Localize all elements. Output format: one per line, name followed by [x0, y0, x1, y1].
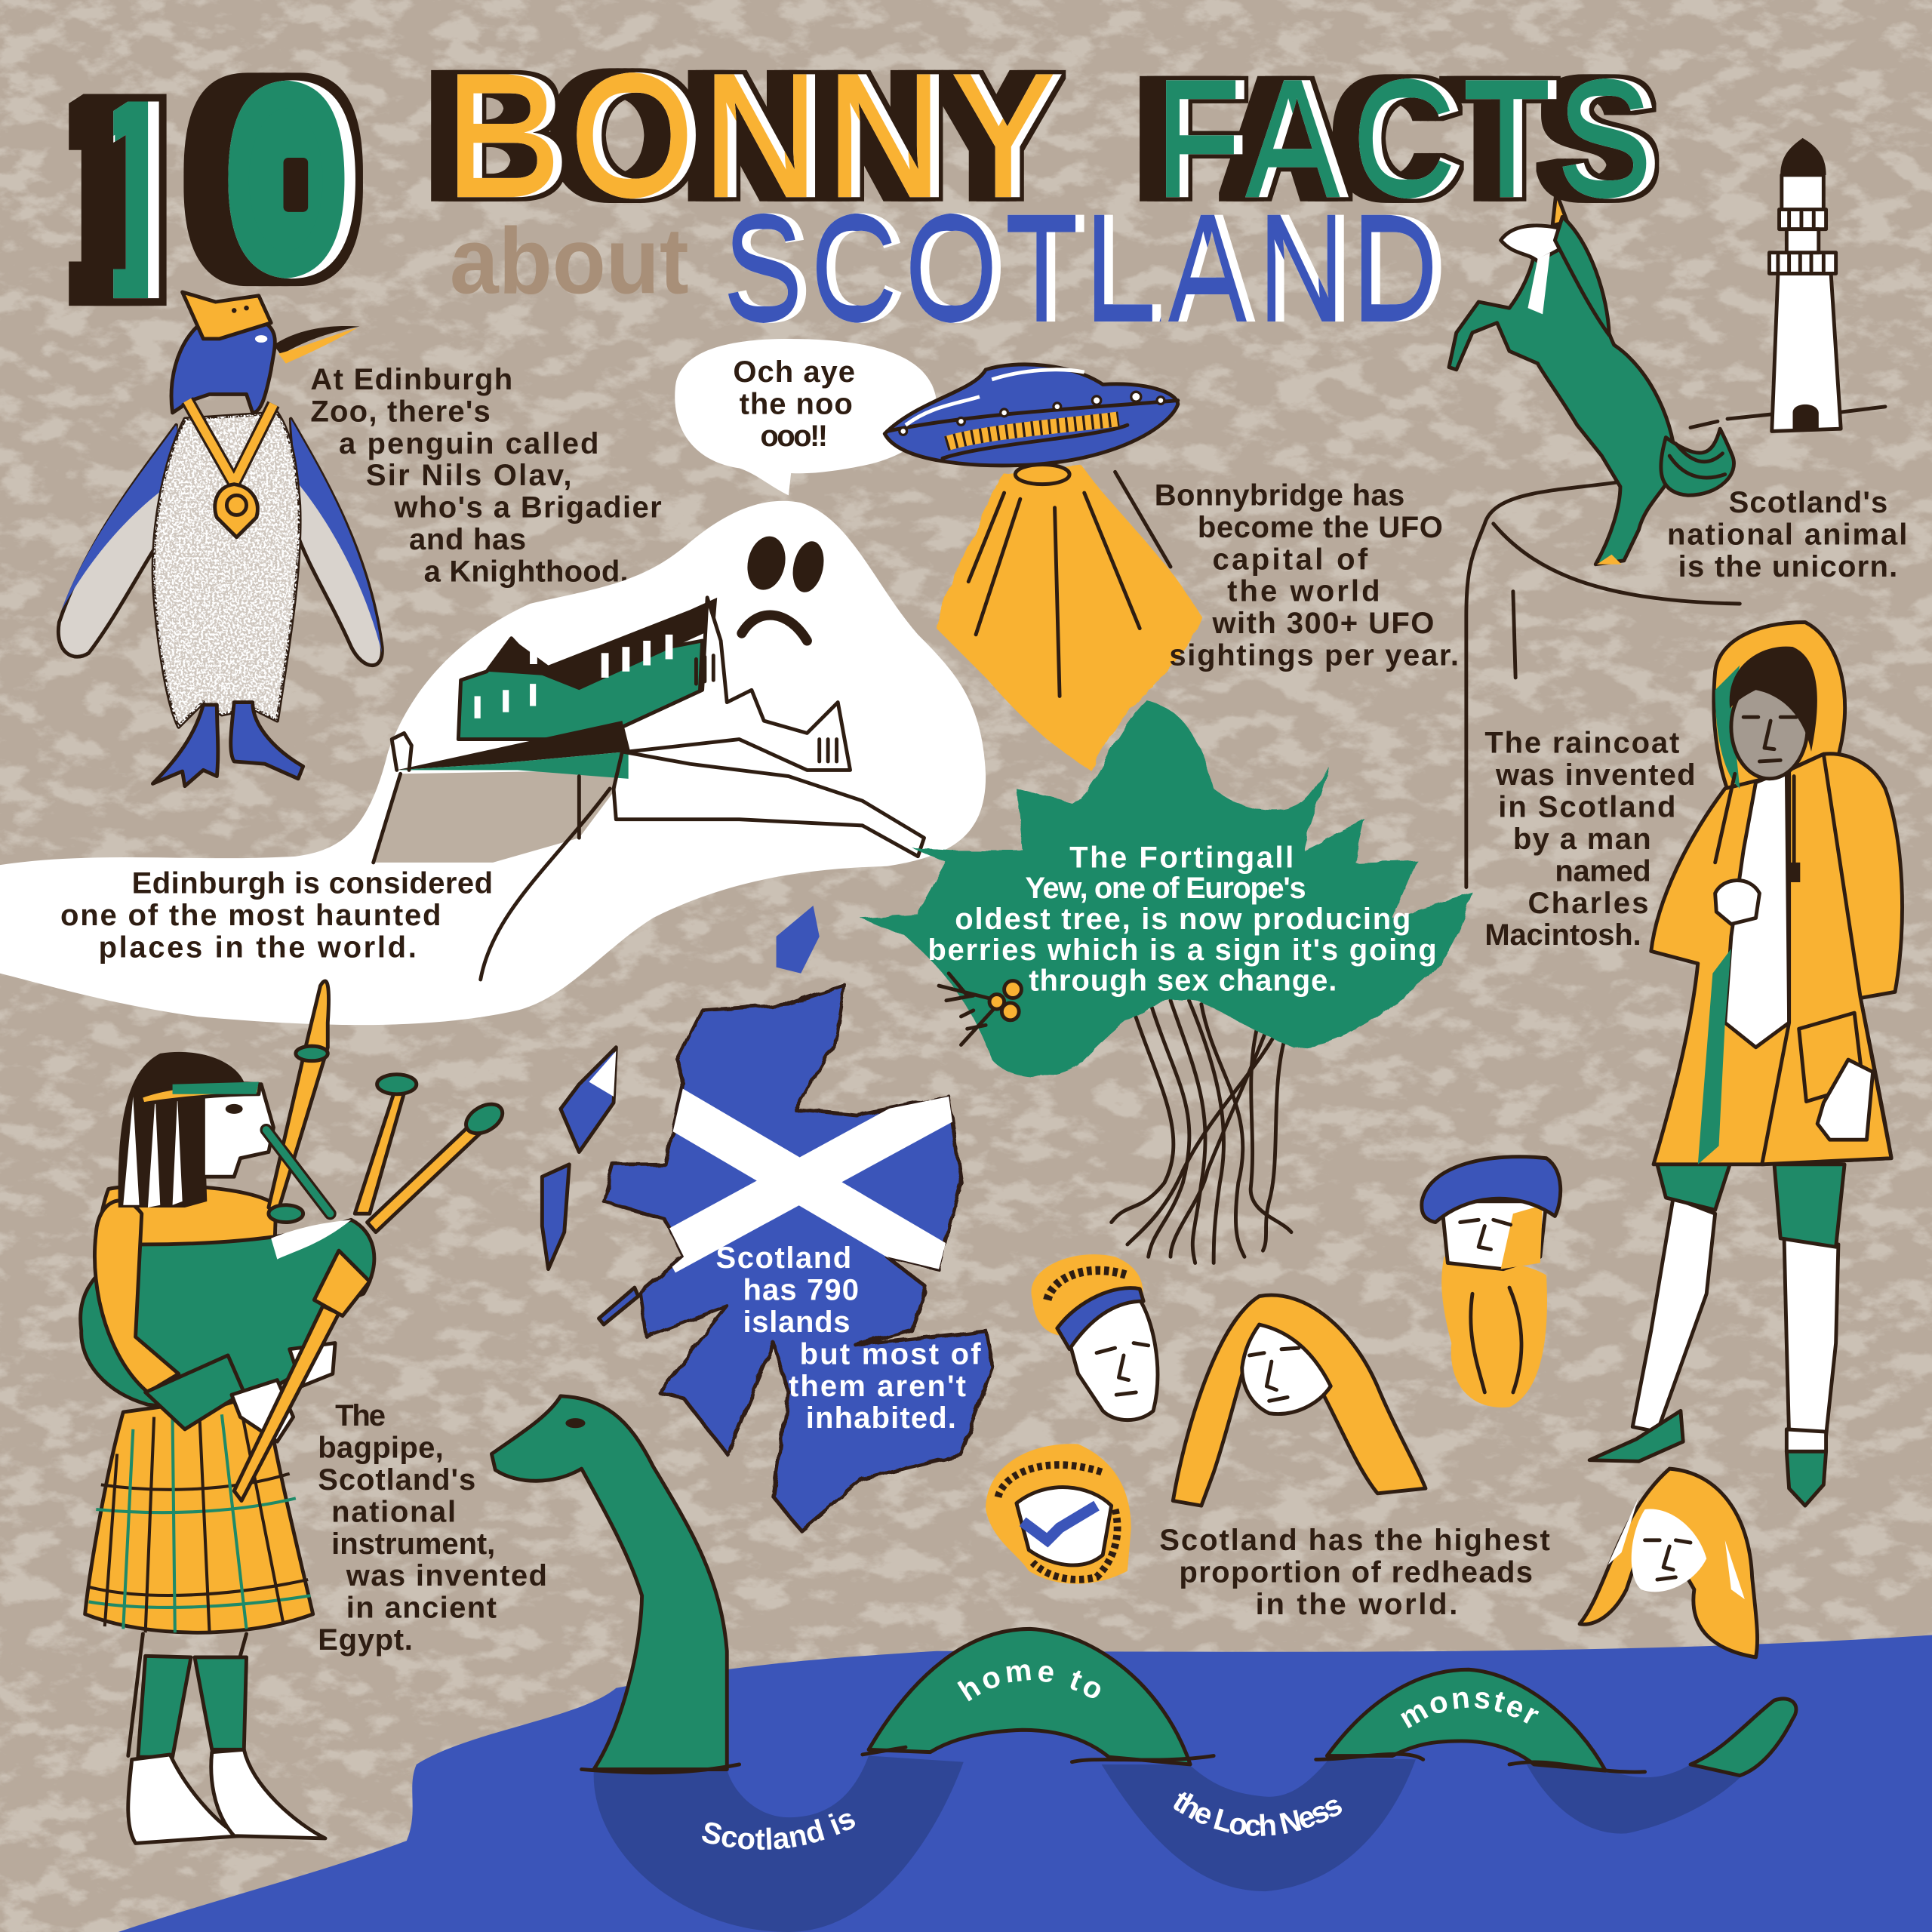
text: haunted fact: one of the most haunted: [60, 899, 441, 932]
text: monster words: home to: [957, 1664, 1100, 1701]
text: penguin fact: who's a Brigadier: [393, 491, 662, 525]
icon: piper: [81, 981, 507, 1843]
text: bagpipe fact: bagpipe,: [318, 1431, 444, 1464]
title word about: about: [450, 210, 689, 314]
text: bagpipe fact: national: [331, 1495, 456, 1528]
text: UFO fact: the world: [1227, 575, 1380, 608]
text: monster words: Scotland is: [702, 1813, 855, 1850]
text: monster words: monster: [1401, 1692, 1540, 1728]
text: raincoat fact: by a man: [1513, 823, 1651, 856]
text: islands fact: but most of: [800, 1337, 981, 1371]
icon: unicorn: [1449, 192, 1734, 565]
title word BONNY: BONNY: [446, 36, 1065, 235]
title number 10: 0: [223, 30, 361, 328]
text: penguin fact: a penguin called: [339, 427, 598, 460]
cliff and ground lines: [1466, 407, 1885, 888]
icon: woman with headband: [1031, 1254, 1158, 1420]
speech bubble: the noo: [740, 388, 853, 421]
underwater body: [594, 1756, 1743, 1932]
text: islands fact: has 790: [743, 1273, 859, 1306]
text: yew fact: [928, 841, 1437, 998]
text: raincoat fact: Macintosh.: [1484, 918, 1641, 952]
icon: tree roots: [1112, 1001, 1291, 1263]
text: yew fact: berries which is a sign it's going: [928, 934, 1437, 967]
text: islands fact: Scotland: [716, 1241, 851, 1275]
ghost face: [742, 533, 828, 641]
text: UFO fact: [1155, 478, 1459, 672]
text: bagpipe fact: Egypt.: [318, 1623, 413, 1657]
title number 10: [69, 72, 363, 306]
text: bagpipe fact: Scotland's: [318, 1463, 475, 1497]
text: monster words: [702, 1664, 1540, 1850]
text: UFO fact: become the UFO: [1198, 511, 1443, 544]
title: [59, 30, 1661, 359]
text: yew fact: The Fortingall: [1069, 841, 1294, 874]
text: unicorn fact: Scotland's: [1729, 486, 1887, 519]
icon: lighthouse: [1769, 138, 1841, 431]
text: UFO fact: capital of: [1213, 543, 1368, 576]
panel: haunted Edinburgh: [0, 339, 986, 1025]
icon: Edinburgh castle: [374, 598, 924, 980]
icon: monster humps: [582, 1629, 1796, 1776]
icon: monster neck and head: [491, 1396, 727, 1769]
ghost shape: [0, 501, 986, 1025]
text: bagpipe fact: was invented: [346, 1559, 547, 1592]
text: yew fact: oldest tree, is now producing: [955, 903, 1411, 936]
text: haunted fact: Edinburgh is considered: [132, 867, 493, 900]
text: islands fact: inhabited.: [806, 1401, 956, 1435]
castle rock: [374, 770, 616, 863]
text: penguin fact: a Knighthood.: [424, 555, 629, 589]
text: islands fact: them aren't: [789, 1370, 966, 1403]
icon: berries: [939, 974, 1021, 1044]
text: redheads fact: in the world.: [1256, 1588, 1457, 1621]
text: raincoat fact: was invented: [1495, 758, 1696, 792]
text: penguin fact: Zoo, there's: [310, 395, 491, 428]
panel: Scotland map fact: [542, 906, 993, 1531]
text: raincoat fact: Charles: [1527, 887, 1648, 920]
panel: Fortingall yew fact: [860, 700, 1474, 1263]
text: UFO fact: with 300+ UFO: [1212, 607, 1434, 640]
text: bagpipe fact: [318, 1399, 547, 1657]
text: penguin fact: Sir Nils Olav,: [366, 459, 572, 492]
panel: UFO fact: [884, 365, 1459, 770]
panel: unicorn fact: [1449, 138, 1907, 888]
icon: woman with long curly hair: [1173, 1295, 1426, 1506]
text: monster words: the Loch Ness: [1174, 1792, 1342, 1836]
speech bubble: Och aye: [733, 355, 855, 389]
title word SCOTLAND: SCOTLAND: [724, 181, 1447, 355]
panel: penguin fact: [58, 292, 662, 786]
text: redheads fact: proportion of redheads: [1179, 1555, 1533, 1589]
text: haunted fact: [60, 867, 493, 964]
text: unicorn fact: [1667, 486, 1907, 583]
icon: penguin: [58, 292, 382, 786]
text: UFO fact: sightings per year.: [1169, 639, 1459, 672]
title number 10: 1: [59, 40, 218, 359]
icon: curly man with sunglasses: [986, 1444, 1131, 1584]
text: raincoat fact: [1484, 727, 1696, 952]
text: redheads fact: Scotland has the highest: [1159, 1524, 1550, 1557]
text: UFO fact: Bonnybridge has: [1155, 478, 1404, 512]
text: islands fact: islands: [743, 1306, 851, 1339]
text: unicorn fact: is the unicorn.: [1678, 550, 1897, 583]
text: raincoat fact: The raincoat: [1484, 727, 1679, 760]
text: penguin fact: [310, 363, 662, 589]
text: bagpipe fact: in ancient: [346, 1592, 497, 1625]
text: penguin fact: and has: [409, 523, 526, 556]
text: raincoat fact: named: [1555, 854, 1651, 888]
text: bagpipe fact: The: [335, 1399, 386, 1432]
text: haunted fact: places in the world.: [99, 931, 417, 964]
text: yew fact: Yew, one of Europe's: [1025, 872, 1306, 905]
text: bagpipe fact: instrument,: [331, 1527, 495, 1561]
speech bubble: [675, 339, 937, 495]
icon: tree crown: [860, 700, 1474, 1076]
text: islands fact: [716, 1241, 981, 1435]
icon: man in raincoat: [1589, 622, 1903, 1506]
panel: Loch Ness monster fact: [490, 1394, 1798, 1932]
icon: blonde woman: [1580, 1469, 1758, 1657]
UFO beam: [937, 465, 1201, 770]
panel: redheads fact: [986, 1157, 1758, 1657]
text: raincoat fact: in Scotland: [1498, 790, 1675, 823]
text: unicorn fact: national animal: [1667, 518, 1907, 552]
icon: map of Scotland: [542, 906, 993, 1531]
loch water: [118, 1635, 1932, 1932]
icon: flying saucer: [884, 365, 1178, 466]
text: penguin fact: At Edinburgh: [310, 363, 512, 396]
text: yew fact: through sex change.: [1029, 964, 1337, 998]
text: redheads fact: [1159, 1524, 1550, 1621]
speech bubble: ooo!!: [760, 420, 828, 453]
panel: raincoat fact: [1484, 622, 1903, 1506]
panel: bagpipe fact: [81, 981, 547, 1843]
icon: bearded man with cap: [1422, 1157, 1561, 1407]
title word FACTS: FACTS: [1155, 43, 1661, 233]
